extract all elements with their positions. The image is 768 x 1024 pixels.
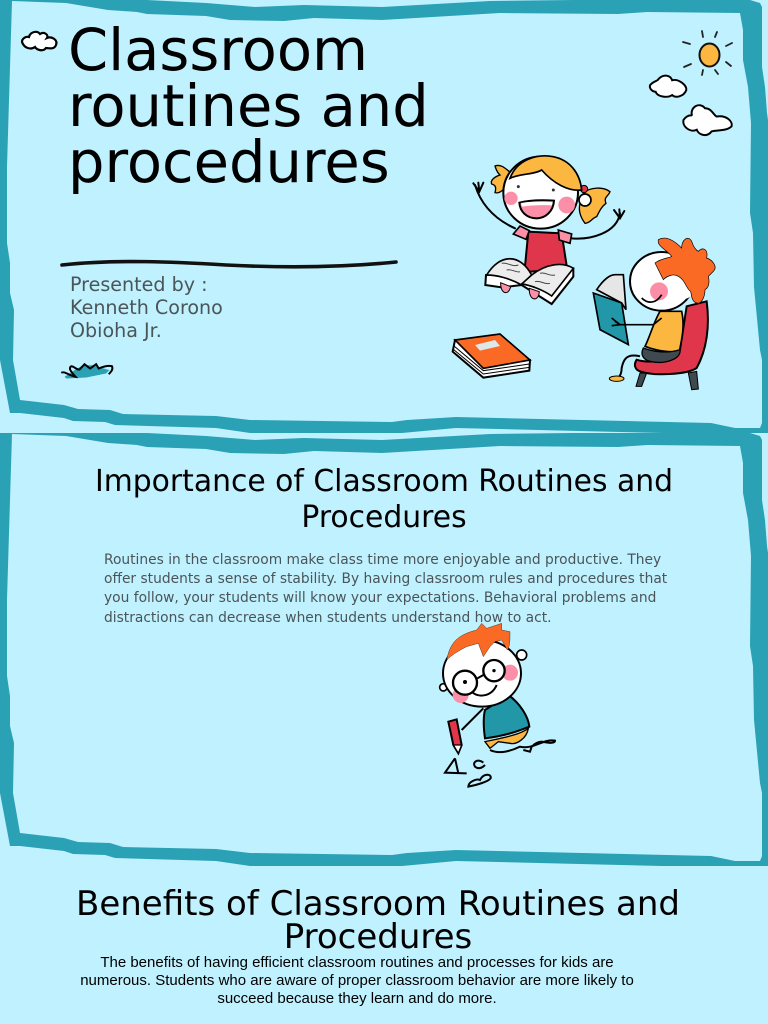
text block: importance body: distractions can decrease when students understand how to act. — [104, 610, 552, 626]
icon: sun — [682, 30, 733, 76]
icon: orange notebook — [452, 333, 532, 379]
heading: benefits: Benefits of Classroom Routines and — [76, 884, 680, 924]
title: routines and — [68, 73, 429, 140]
divider: brush line under title — [60, 260, 398, 269]
text block: importance body: Routines in the classroom make class time more enjoyable and productive. They — [104, 552, 661, 568]
text block: presenter: Presented by : — [70, 273, 208, 296]
icon: cloud lower — [682, 104, 733, 136]
icon: girl reading — [472, 155, 626, 306]
text block: presenter: Kenneth Corono — [70, 296, 223, 319]
text block: benefits body: The benefits of having efficient classroom routines and processes for kids are — [100, 954, 614, 971]
text block: benefits body: succeed because they learn and do more. — [217, 990, 497, 1007]
text block: benefits body: numerous. Students who are aware of proper classroom behavior are more likely to — [80, 972, 634, 989]
icon: boy reading in chair — [592, 238, 716, 390]
icon: small cloud top left — [20, 30, 58, 52]
title — [68, 17, 429, 196]
panel: slide 2 frame — [0, 433, 768, 866]
icon: cloud upper — [648, 74, 688, 98]
title: Classroom — [68, 17, 368, 84]
text block: benefits body — [80, 954, 634, 1007]
heading: importance: Procedures — [301, 500, 467, 534]
text block: importance body — [104, 552, 667, 626]
icon: grass tuft — [60, 362, 114, 378]
heading: importance: Importance of Classroom Routines and — [95, 464, 673, 499]
heading: benefits — [76, 884, 680, 957]
panel: slide 1 frame — [0, 0, 768, 433]
icon: boy writing letters — [438, 623, 556, 788]
heading: benefits: Procedures — [284, 917, 472, 957]
text block: presenter: Obioha Jr. — [70, 319, 162, 342]
title: procedures — [68, 129, 390, 196]
heading: importance — [95, 464, 673, 534]
text block: importance body: offer students a sense of stability. By having classroom rules and procedures that — [104, 571, 667, 587]
text block: presenter — [70, 273, 223, 342]
text block: importance body: you follow, your students will know your expectations. Behavioral problems and — [104, 590, 656, 606]
